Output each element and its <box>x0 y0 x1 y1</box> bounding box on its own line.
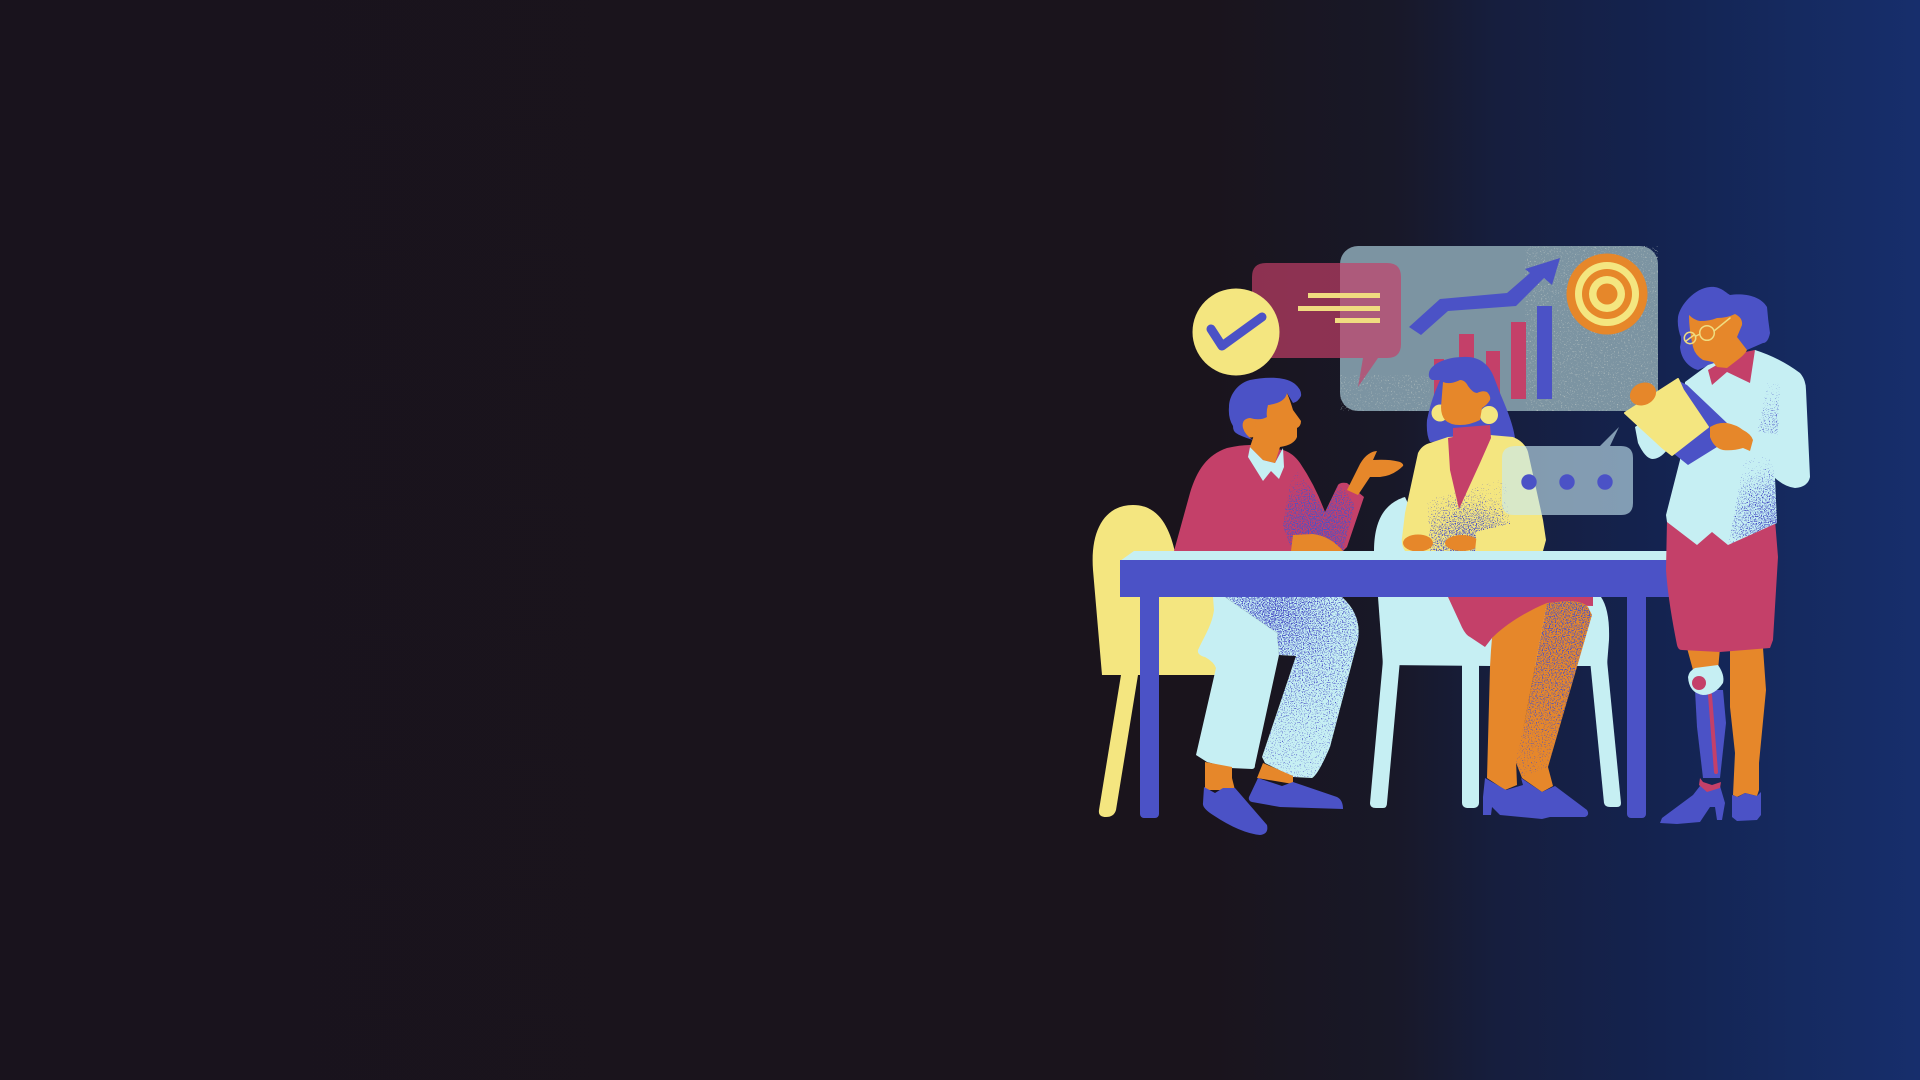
table <box>1120 551 1670 818</box>
seated woman's hair <box>1427 357 1515 442</box>
yellow chair <box>1093 505 1225 817</box>
seated woman's turtleneck <box>1448 425 1491 509</box>
man's head <box>1229 378 1301 463</box>
standing woman's hair <box>1678 287 1770 370</box>
skirt <box>1448 597 1593 647</box>
grain: jacket shading <box>1427 478 1510 551</box>
rear leg <box>1515 601 1592 792</box>
grain: blouse shading <box>1728 383 1780 545</box>
standing woman's right shoe <box>1732 792 1761 821</box>
man's collar <box>1248 447 1284 481</box>
grain: leg shading <box>1515 601 1592 778</box>
bar chart <box>1434 306 1552 399</box>
standing woman's hands <box>1626 378 1753 451</box>
icon: growth arrow <box>1409 258 1560 335</box>
man's trousers <box>1196 597 1359 778</box>
callout: typing dots bubble <box>1502 427 1633 515</box>
standing woman's face <box>1689 314 1747 368</box>
standing woman's legs <box>1687 648 1766 797</box>
man's ankles <box>1205 762 1293 790</box>
panel: growth chart board <box>1340 246 1658 411</box>
standing woman's blouse <box>1666 350 1810 545</box>
heeled shoes <box>1483 778 1588 819</box>
light chair <box>1370 497 1621 808</box>
book <box>1625 379 1727 465</box>
man's resting hand <box>1291 534 1343 551</box>
prosthetic foot shoe <box>1660 786 1725 824</box>
standing woman's collar <box>1708 350 1755 385</box>
icon: check mark badge <box>1192 288 1280 376</box>
seated woman's hands <box>1403 534 1479 552</box>
standing woman's left arm <box>1635 410 1690 459</box>
icon: target <box>1566 254 1648 334</box>
grain: sweater shading <box>1283 470 1355 551</box>
person: seated woman in yellow jacket <box>1402 357 1546 552</box>
seated woman's jacket <box>1402 435 1546 551</box>
man's shoes <box>1203 778 1343 835</box>
person: standing woman with prosthetic leg <box>1625 287 1810 824</box>
callout: red text speech bubble <box>1252 263 1401 387</box>
glasses <box>1684 318 1730 344</box>
standing woman's skirt <box>1666 520 1778 652</box>
ankle ring <box>1699 778 1721 792</box>
prosthetic leg <box>1660 665 1726 824</box>
man's sweater <box>1174 445 1364 551</box>
seated woman's face <box>1441 380 1490 425</box>
man's gesturing hand <box>1347 451 1403 495</box>
person: man in red sweater <box>1174 378 1403 835</box>
front leg <box>1487 603 1547 790</box>
board speckle texture <box>1340 246 1658 411</box>
seated woman's sleeve <box>1475 524 1530 551</box>
seated woman's earrings <box>1432 404 1498 424</box>
seated woman's skirt and legs <box>1448 597 1593 819</box>
